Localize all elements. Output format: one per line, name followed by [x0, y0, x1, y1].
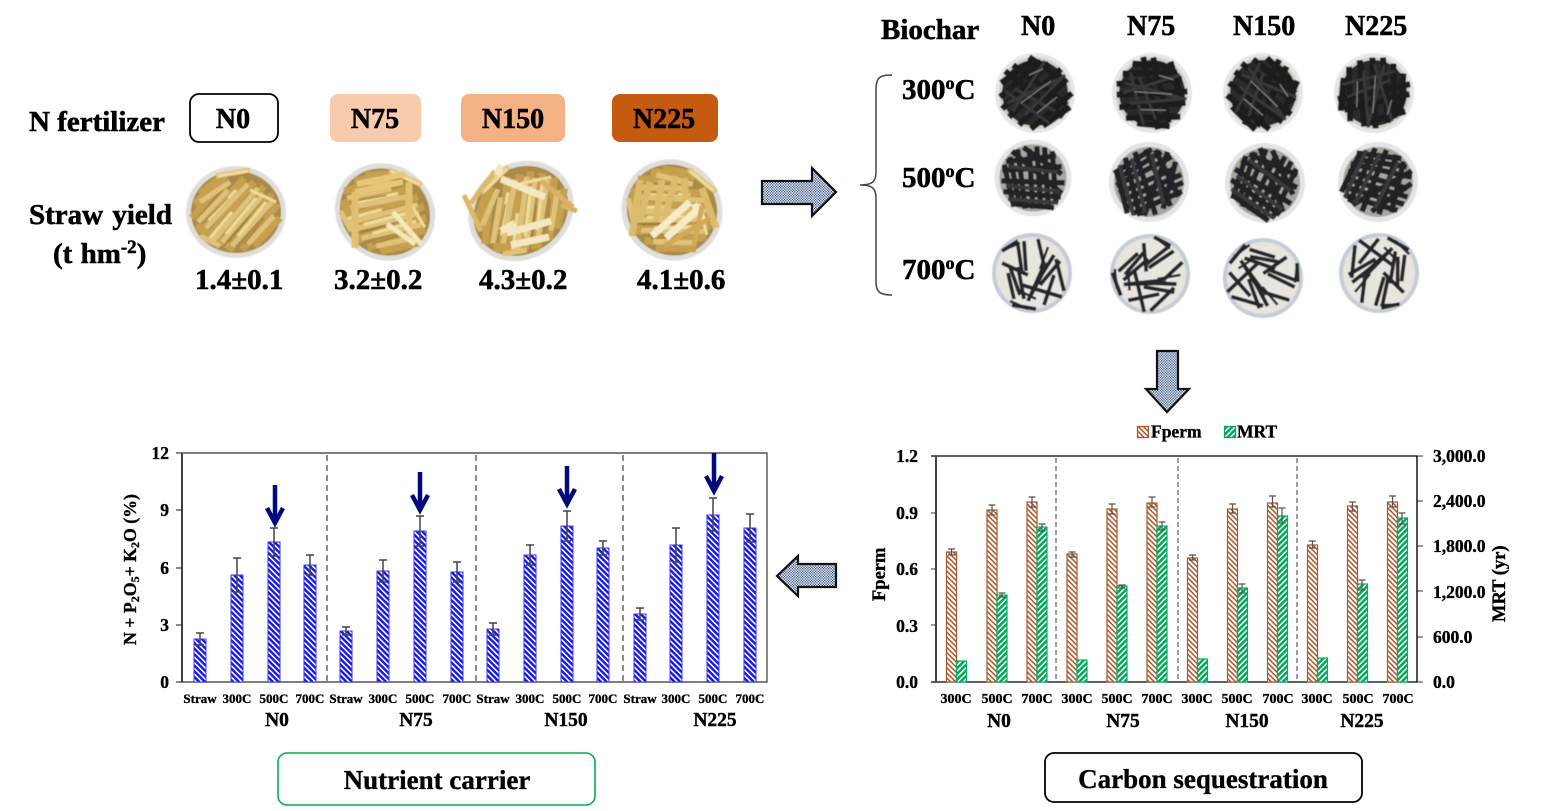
x tick labels: 300C	[516, 691, 544, 706]
callout: nutrient carrier	[278, 753, 595, 805]
x tick labels: 500C	[1221, 692, 1253, 707]
row label: straw yield	[29, 199, 172, 270]
left y ticks: 0.0	[896, 672, 918, 692]
arrow: biochar to carbon chart	[1146, 351, 1189, 412]
right y ticks: 2,400.0	[1433, 491, 1486, 511]
right y ticks: 1,800.0	[1433, 536, 1486, 556]
right y ticks: 0.0	[1433, 672, 1455, 692]
N level box: N75	[330, 94, 421, 142]
biochar table header: N225	[1345, 11, 1407, 42]
group labels: N150	[544, 710, 588, 731]
chart frame	[931, 456, 1417, 682]
x tick labels: Straw	[183, 691, 217, 706]
y axis ticks: 6	[160, 558, 169, 578]
y axis ticks: 9	[160, 500, 169, 520]
highlight arrows	[267, 453, 722, 523]
x tick labels: 700C	[1141, 692, 1173, 707]
temperature label 500C: o	[946, 161, 954, 181]
arrow: straw to biochar	[762, 168, 836, 216]
x tick labels: 700C	[1382, 692, 1414, 707]
straw yield value N0: 1.4±0.1	[195, 264, 283, 296]
group labels: N225	[693, 710, 737, 731]
x tick labels: 500C	[260, 691, 288, 706]
left y ticks: 1.2	[896, 446, 918, 466]
MRT bars	[956, 516, 1408, 682]
N level box: N150: N150	[482, 104, 544, 135]
legend: MRT	[1237, 422, 1278, 442]
temperature label 300C: C	[954, 74, 975, 106]
temperature label 300C: 300	[902, 74, 946, 106]
right y axis title: MRT (yr)	[1490, 545, 1510, 622]
straw yield value N75: 3.2±0.2	[334, 264, 422, 296]
legend: Fperm	[1151, 422, 1202, 442]
x tick labels: 700C	[589, 691, 617, 706]
x tick labels: 700C	[443, 691, 471, 706]
x tick labels: 300C	[940, 692, 972, 707]
group labels: N75	[399, 710, 433, 731]
error bars	[948, 496, 1406, 597]
row label: straw yield: -2	[121, 237, 137, 258]
group labels	[987, 711, 1384, 732]
x tick labels: 500C	[981, 692, 1013, 707]
x tick labels: 300C	[662, 691, 690, 706]
left y ticks: 0.9	[896, 503, 918, 523]
group labels: N150	[1225, 711, 1269, 732]
photo grid: biochar dishes	[992, 37, 1430, 333]
row label: straw yield: Straw yield	[29, 199, 172, 231]
y axis title: N + P	[120, 602, 140, 645]
photo: straw dish N0	[186, 166, 286, 258]
x tick labels: 500C	[699, 691, 727, 706]
callout: carbon sequestration: Carbon sequestration	[1078, 764, 1328, 794]
N level box: N75: N75	[351, 104, 399, 135]
x tick labels: 300C	[369, 691, 397, 706]
left y ticks: 0.3	[896, 616, 918, 636]
right y ticks: 600.0	[1433, 627, 1473, 647]
callout: carbon sequestration	[1045, 753, 1362, 802]
row label: straw yield: (t hm	[53, 238, 121, 270]
x tick labels: 700C	[296, 691, 324, 706]
x tick labels	[940, 692, 1414, 707]
right y ticks: 3,000.0	[1433, 446, 1486, 466]
error bars	[196, 498, 754, 645]
bracket	[860, 75, 892, 295]
photo: straw dish N150	[449, 140, 593, 282]
y axis title: 5	[128, 576, 142, 582]
bars	[194, 515, 756, 682]
temperature label 300C: o	[946, 73, 954, 93]
temperature label 700C: C	[954, 254, 975, 286]
N level box: N0	[190, 94, 278, 142]
arrow: to nutrient chart	[777, 556, 836, 596]
group labels: N225	[1340, 711, 1384, 732]
left y ticks	[896, 446, 918, 692]
N level box: N225: N225	[633, 104, 695, 135]
x tick labels	[183, 691, 764, 706]
y axis ticks: 0	[160, 672, 169, 692]
x tick labels: 500C	[1342, 692, 1374, 707]
biochar table header	[881, 11, 1407, 46]
x tick labels: 700C	[1021, 692, 1053, 707]
N level box: N225	[612, 94, 718, 142]
x tick labels: Straw	[623, 691, 657, 706]
left y ticks: 0.6	[896, 559, 918, 579]
y axis ticks: 3	[160, 615, 169, 635]
x tick labels: 500C	[406, 691, 434, 706]
y axis title: 2	[128, 596, 142, 602]
temperature label 700C: o	[946, 253, 954, 273]
right y ticks: 1,200.0	[1433, 582, 1486, 602]
y axis title: O (%)	[120, 494, 141, 542]
x tick labels: Straw	[476, 691, 510, 706]
chart frame	[182, 453, 767, 682]
x tick labels: 300C	[1181, 692, 1213, 707]
biochar table header: Biochar	[881, 14, 979, 46]
group labels: N75	[1106, 711, 1140, 732]
x tick labels: 300C	[1061, 692, 1093, 707]
row label: N fertilizer: N fertilizer	[29, 106, 165, 138]
x tick labels: Straw	[329, 691, 363, 706]
temperature label 500C: 500	[902, 162, 946, 194]
photo: straw dish N75	[316, 144, 454, 280]
group labels: N0	[265, 710, 289, 731]
x tick labels: 700C	[736, 691, 764, 706]
x tick labels: 500C	[553, 691, 581, 706]
N level box: N150	[461, 94, 565, 142]
left y axis title: Fperm	[870, 547, 890, 601]
N level box: N0: N0	[216, 104, 250, 135]
temperature label 500C: C	[954, 162, 975, 194]
group labels: N0	[987, 711, 1011, 732]
x tick labels: 500C	[1101, 692, 1133, 707]
photo: straw dish N225	[601, 139, 743, 281]
Fperm bars	[946, 502, 1398, 682]
y axis ticks	[152, 443, 169, 692]
y axis title: + K	[120, 548, 140, 576]
row label: straw yield: )	[137, 238, 146, 270]
right y ticks	[1433, 446, 1486, 692]
x tick labels: 700C	[1262, 692, 1294, 707]
y axis title: 2	[128, 542, 142, 548]
biochar table header: N75	[1127, 11, 1175, 42]
temperature label 700C: 700	[902, 254, 946, 286]
callout: nutrient carrier: Nutrient carrier	[344, 765, 530, 795]
x tick labels: 300C	[1301, 692, 1333, 707]
biochar table header: N0	[1021, 11, 1055, 42]
chart: Fperm and MRT bar chart	[870, 446, 1510, 732]
y axis title: O	[120, 582, 140, 596]
chart: nutrient content bar chart	[120, 443, 767, 731]
biochar table header: N150	[1233, 11, 1295, 42]
y axis ticks: 12	[152, 443, 169, 463]
group labels	[265, 710, 737, 731]
straw yield value N225: 4.1±0.6	[637, 264, 725, 296]
legend	[1138, 422, 1278, 442]
straw yield value N150: 4.3±0.2	[479, 264, 567, 296]
x tick labels: 300C	[223, 691, 251, 706]
